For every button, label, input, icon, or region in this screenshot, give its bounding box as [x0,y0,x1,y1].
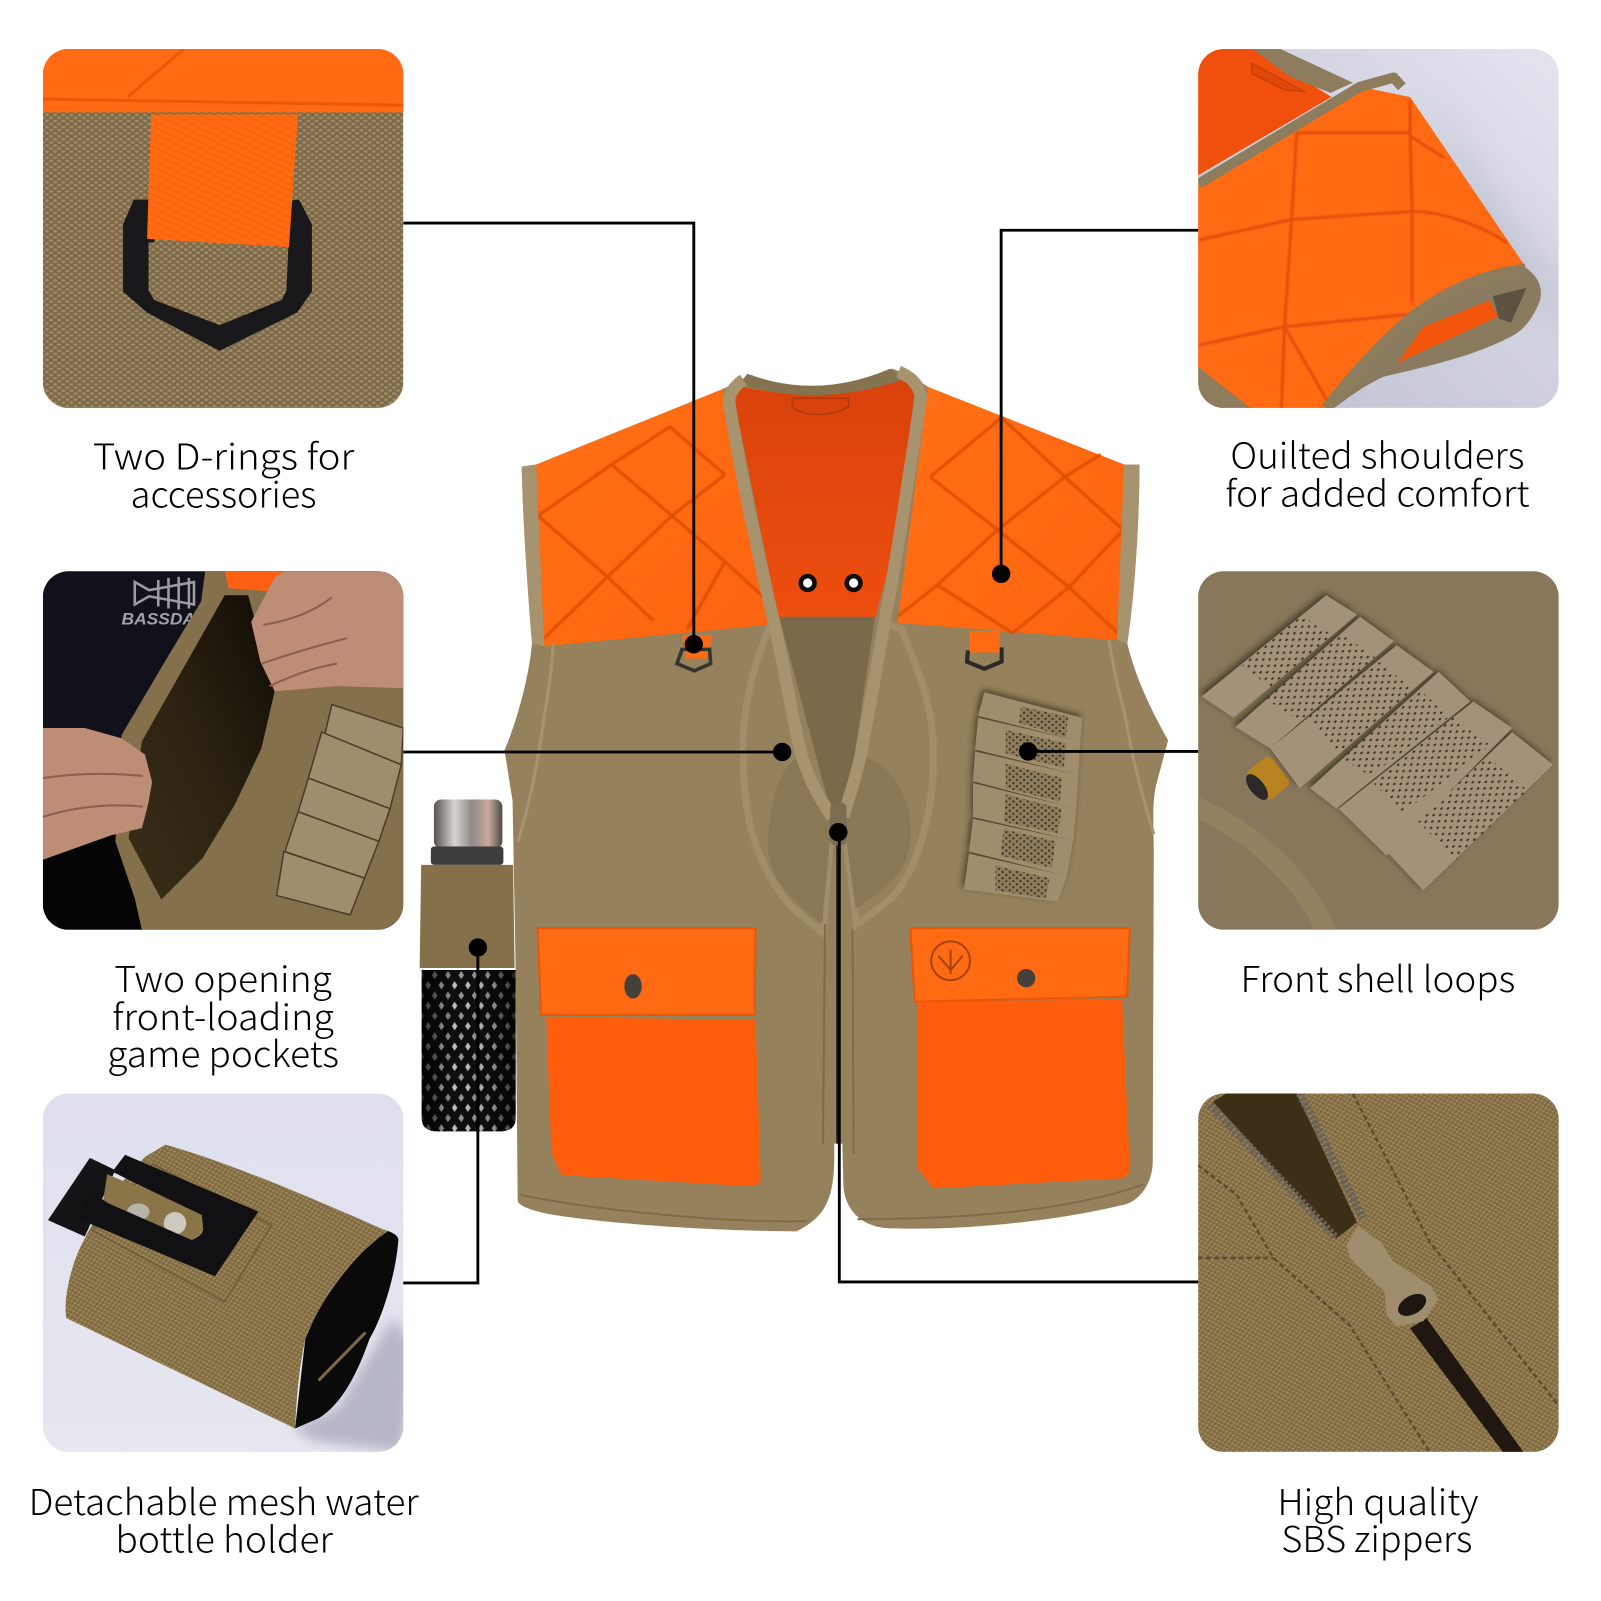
table shadow [1450,150,1558,312]
brass shell [1246,756,1290,800]
panel: front shell loops closeup [1195,571,1559,934]
leader line: quilted shoulders [1001,230,1198,574]
center zipper [830,803,846,1144]
snap buttons [127,1204,186,1234]
water bottle in mesh holder [420,799,516,1131]
caption: quilted shoulders: for added comfort [1225,466,1530,517]
leader line: shell loops [1028,750,1198,753]
quilting lines [1199,100,1507,408]
black webbing strap [48,1158,115,1236]
panel: quilted shoulder closeup [1198,49,1562,408]
slider ring [1394,1289,1430,1321]
panel: SBS zipper closeup [1198,1094,1559,1452]
pocket stitching band [1195,807,1327,934]
eyelet right [844,574,863,592]
left gusset pocket [743,623,832,933]
caption: quilted shoulders [1225,429,1530,517]
cast shadow [291,1317,414,1452]
leader line: game pockets [403,751,782,753]
collar bands [729,372,921,817]
mesh sleeve [422,970,516,1131]
metal belt clip [77,1155,258,1276]
leader line: zipper [839,832,1198,1282]
bottle band [431,846,503,865]
caption: zippers [1277,1475,1479,1563]
dot: game pockets [773,743,791,761]
cuff black interior [295,1230,398,1428]
six perforated loops [1202,595,1553,890]
right gusset pocket [843,623,933,925]
caption: game pockets [107,952,339,1078]
orange shoulder edge [43,49,403,112]
leader line: bottle holder [403,948,478,1283]
panel: opening game pockets closeup [43,571,403,930]
inner strap detail [319,1332,366,1380]
orange tab [147,114,298,247]
caption: game pockets: game pockets [107,1027,339,1078]
steel bottle cap [434,799,502,848]
round logo patch [931,941,970,980]
canvas collar [420,865,515,968]
olive back trim [1253,49,1353,93]
caption: bottle holder: bottle holder [115,1513,333,1564]
brand wordmark: BASSDA [122,610,195,628]
right orange pocket [910,928,1130,1188]
under-shoulder olive rim [1317,268,1541,408]
left quilted shoulder [536,389,768,646]
dot: shell loops [1019,742,1037,761]
vest body [504,369,1168,1231]
stitching [1198,1094,1558,1452]
armhole trims [522,465,1139,646]
caption: zippers: SBS zippers [1281,1512,1472,1563]
shell loops in pocket view [277,705,403,915]
inner neck tab [1252,63,1305,92]
left hand [43,728,152,860]
interior orange back panel [731,376,917,619]
right hand [251,571,403,691]
caption: D-rings [93,430,354,518]
shell loops on vest [964,692,1082,902]
zipper teeth [1210,1094,1363,1239]
caption: game pockets: front-loading [112,990,334,1041]
neck label tab [792,398,848,415]
panel: detachable belt clip cuff [43,1094,414,1452]
quilted orange shoulder [1198,87,1525,408]
eyelet left [798,574,817,592]
front placket seams [521,924,1144,1221]
caption: zippers: High quality [1277,1475,1479,1526]
caption: bottle holder: Detachable mesh water [29,1475,419,1526]
caption: shell loops: Front shell loops [1241,952,1515,1003]
lower zipper gap [1410,1318,1523,1452]
left D-ring [677,635,713,671]
binding trim [1199,78,1525,408]
under-shoulder dark [1493,288,1526,323]
lower black shirt [43,832,143,930]
panel: D-ring closeup [43,49,403,408]
dot: quilted shoulders [992,565,1010,583]
slot canvas [102,1174,204,1244]
caption: D-rings: accessories [131,467,317,518]
zipper slider [1347,1226,1439,1326]
neck trim [739,369,903,395]
canvas cuff [66,1145,388,1428]
dark opening [1213,1094,1357,1239]
pocket opening [129,595,275,900]
caption: bottle holder [29,1475,419,1564]
right D-ring [967,631,1002,669]
dot: zipper [829,823,847,841]
caption: quilted shoulders: Ouilted shoulders [1230,429,1524,480]
bottom-left trim [1198,367,1251,408]
orange shoulder sliver [225,571,288,591]
caption: game pockets: Two opening [114,952,332,1003]
left orange pocket [538,928,761,1185]
armhole stitching [518,640,1154,842]
under orange [1397,300,1498,363]
clip backing tab [92,1164,272,1302]
interior olive lining [779,617,875,817]
dot: bottle holder [469,938,487,957]
leader line: D-rings [403,223,694,644]
caption: D-rings: Two D-rings for [93,430,354,481]
brand fish logo [135,577,194,610]
inner orange [1198,49,1331,176]
right quilted shoulder [897,387,1124,640]
D-ring [125,201,310,349]
main product: hunting vest [420,369,1168,1231]
dot: D-rings [685,635,703,653]
vest front panel [115,571,403,930]
